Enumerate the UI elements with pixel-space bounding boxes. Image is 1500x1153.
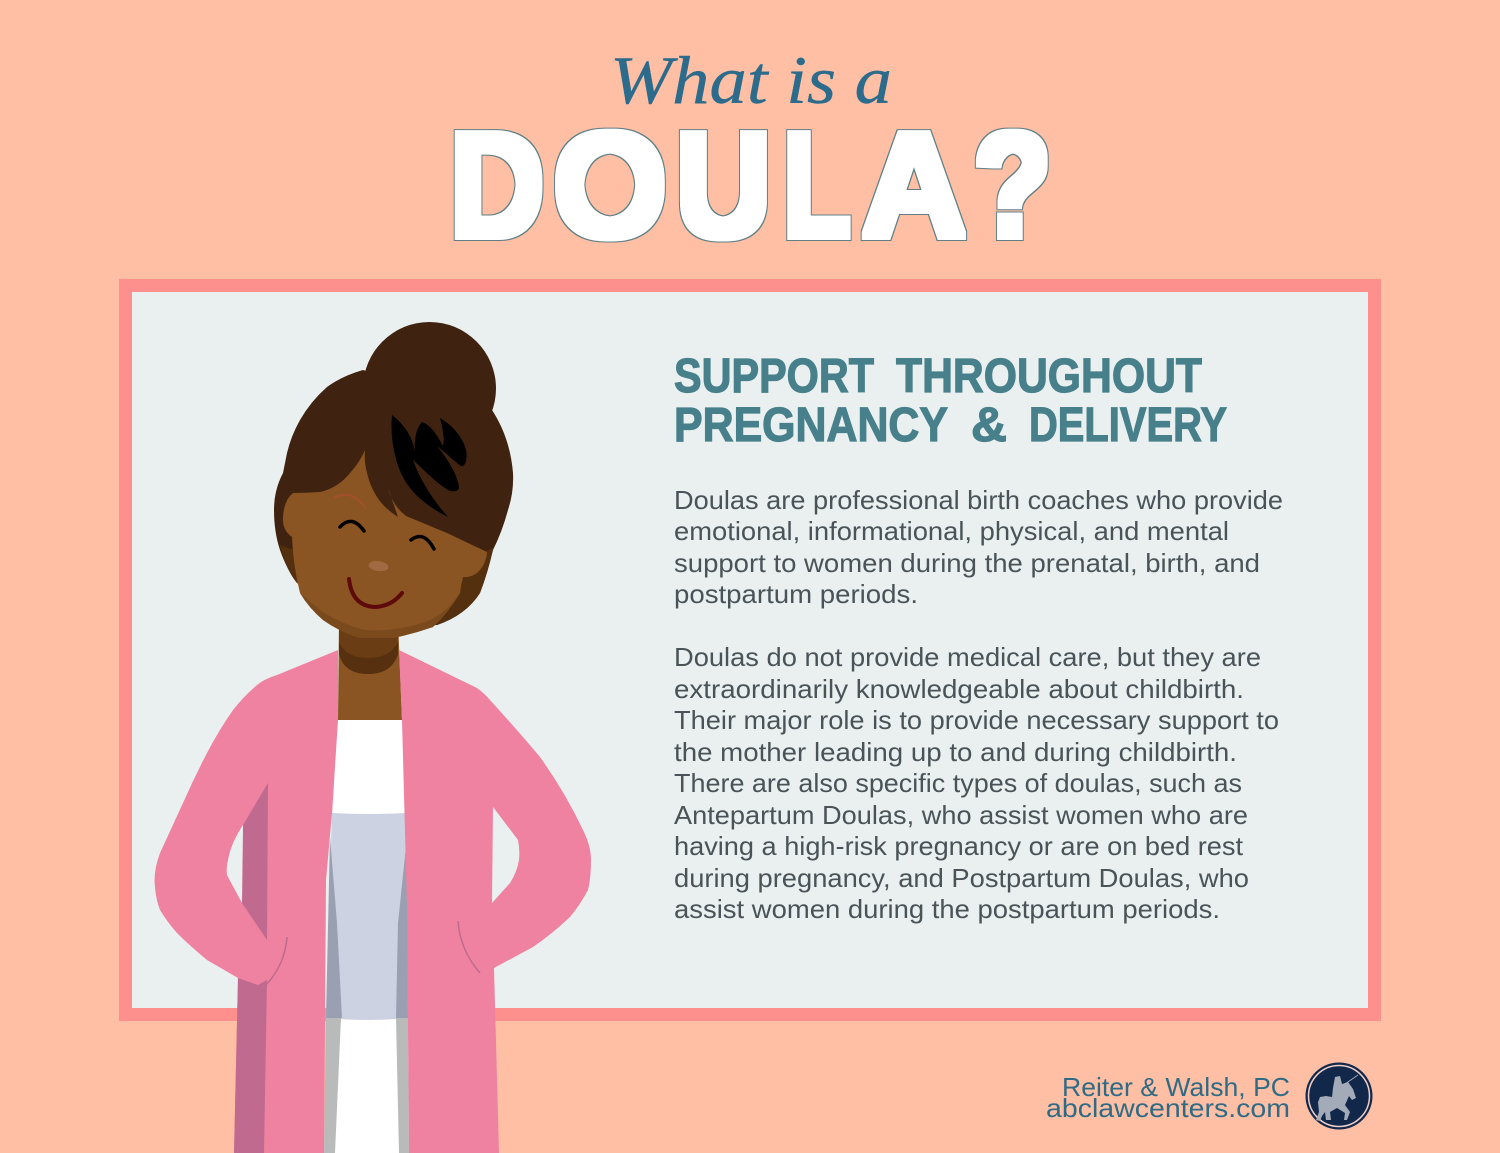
title: DOULA? [450, 103, 1051, 268]
cardigan left [155, 650, 338, 1153]
heading: support throughout pregnancy and delivery: THROUGHOUT [896, 350, 1202, 403]
hair highlight [391, 415, 467, 517]
neck [338, 620, 402, 720]
footer text: firm name and website: Reiter & Walsh, PC [1062, 1072, 1290, 1102]
logo: knight on horse [1306, 1062, 1372, 1130]
text block: first paragraph [674, 485, 1283, 609]
text block: second paragraph: Doulas do not provide medical care, but they are [674, 642, 1261, 672]
heading: support throughout pregnancy and delivery: SUPPORT [674, 350, 874, 403]
panel: description card [126, 286, 1374, 1014]
face [283, 450, 487, 638]
text block: second paragraph: having a high-risk pregnancy or are on bed rest [674, 831, 1244, 861]
chin shading [300, 593, 460, 638]
text block: second paragraph: the mother leading up to and during childbirth. [674, 737, 1237, 767]
footer text: firm name and website [1046, 1072, 1290, 1123]
heading: support throughout pregnancy and delivery: DELIVERY [1029, 399, 1227, 452]
text block: second paragraph: Antepartum Doulas, who assist women who are [674, 800, 1248, 830]
title: DOULA?: ? [974, 103, 1051, 268]
text block: first paragraph: Doulas are professional birth coaches who provide [674, 485, 1283, 515]
text block: second paragraph: Their major role is to provide necessary support to [674, 705, 1279, 735]
title: DOULA?: U [676, 103, 771, 268]
text block: second paragraph: assist women during the postpartum periods. [674, 894, 1220, 924]
smile [349, 579, 402, 607]
text block: first paragraph: support to women during the prenatal, birth, and [674, 548, 1260, 578]
title: DOULA?: L [784, 103, 850, 268]
heading: support throughout pregnancy and delivery: PREGNANCY [674, 399, 948, 452]
text block: second paragraph: extraordinarily knowledgeable about childbirth. [674, 674, 1244, 704]
text block: second paragraph: during pregnancy, and Postpartum Doulas, who [674, 863, 1249, 893]
title: DOULA?: A [862, 103, 966, 268]
title: DOULA?: O [553, 103, 667, 268]
eyebrow [334, 495, 365, 507]
title: DOULA?: D [450, 103, 544, 268]
heading: support throughout pregnancy and delivery [674, 350, 1227, 452]
title: What is a: What is a [610, 42, 892, 118]
shirt [324, 718, 410, 1153]
cardigan right [399, 650, 591, 1153]
illustration: doula character [155, 322, 591, 1153]
eyes [340, 521, 434, 549]
text block: second paragraph [674, 642, 1279, 924]
text block: second paragraph: There are also specific types of doulas, such as [674, 768, 1242, 798]
text block: first paragraph: emotional, informational, physical, and mental [674, 516, 1229, 546]
nose [368, 560, 389, 572]
text block: first paragraph: postpartum periods. [674, 579, 918, 609]
footer text: firm name and website: abclawcenters.com [1046, 1093, 1290, 1123]
hair [274, 322, 513, 625]
heading: support throughout pregnancy and delivery: & [971, 399, 1007, 452]
